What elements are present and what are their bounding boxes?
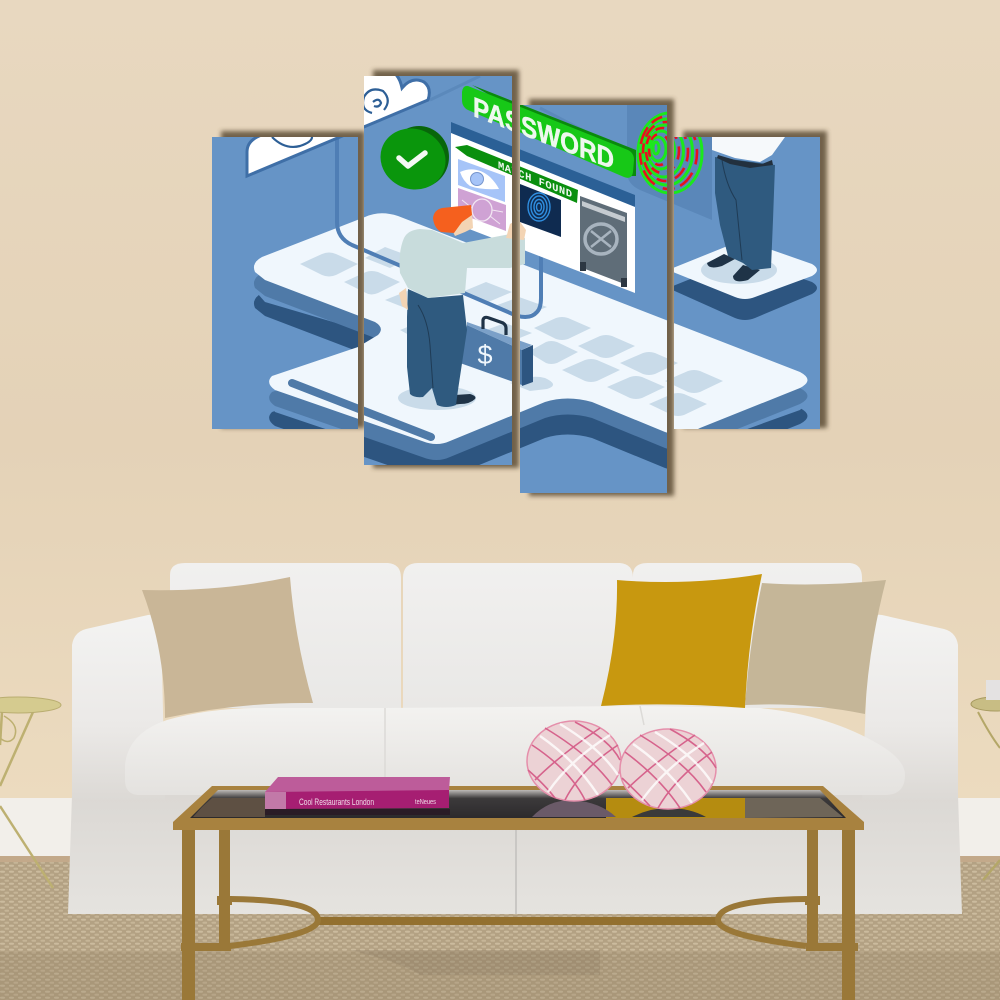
table top frame bbox=[173, 786, 864, 830]
vault safe bbox=[580, 196, 627, 287]
spacebar slot bbox=[292, 383, 431, 437]
canvas artwork: four panels bbox=[212, 76, 820, 493]
fingerprint tile bbox=[520, 184, 561, 237]
sofa skirt bbox=[68, 795, 962, 914]
back wall bands bbox=[430, 76, 583, 129]
platform top bbox=[254, 213, 807, 444]
screen board bbox=[451, 133, 635, 293]
man's hand bbox=[506, 222, 526, 240]
second man bbox=[707, 137, 785, 281]
man's far shoe bbox=[456, 394, 476, 404]
man's hair bbox=[433, 205, 472, 233]
cloud icon bbox=[247, 68, 429, 176]
man's face bbox=[454, 212, 473, 236]
book bbox=[265, 777, 450, 815]
man at screen bbox=[399, 205, 526, 407]
second man's belt bbox=[717, 155, 773, 168]
right tan pillow bbox=[745, 580, 886, 714]
fingerprint wall panel bbox=[627, 100, 712, 220]
briefcase: $ bbox=[477, 340, 493, 370]
check badge bbox=[380, 126, 449, 190]
book top bbox=[265, 777, 450, 792]
left tan pillow bbox=[142, 577, 313, 718]
keyboard keys bbox=[300, 247, 723, 416]
password sign: PASSWORD bbox=[473, 92, 614, 176]
book title: Cool Restaurants London bbox=[299, 797, 374, 807]
coffee table bbox=[173, 786, 864, 1000]
second man's shirt bbox=[712, 137, 785, 162]
book publisher: teNeues bbox=[415, 799, 436, 806]
book cover bbox=[265, 790, 449, 809]
man's trousers bbox=[407, 289, 467, 407]
yellow pillow bbox=[601, 574, 762, 708]
sofa back cushions bbox=[170, 563, 862, 708]
right vase bbox=[620, 729, 716, 809]
face tile bbox=[458, 188, 506, 231]
carpet floor bbox=[0, 862, 1000, 1000]
panel shadows bbox=[221, 70, 827, 496]
second man's trousers bbox=[715, 157, 775, 270]
second man's shoes bbox=[707, 254, 760, 281]
eye tile bbox=[458, 159, 505, 202]
platform gaps bbox=[259, 293, 802, 429]
glass vases bbox=[527, 721, 716, 817]
baseboard bbox=[0, 798, 1000, 862]
sofa right arm bbox=[862, 615, 958, 800]
vase reflection left bbox=[532, 800, 616, 817]
large fingerprint bbox=[638, 113, 702, 193]
screen bbox=[451, 122, 635, 293]
vase reflection right bbox=[632, 808, 706, 817]
screen header band bbox=[451, 122, 635, 207]
sofa seat cushions bbox=[125, 706, 905, 795]
left vase bbox=[527, 721, 621, 801]
man's floor shadow bbox=[398, 386, 476, 410]
side table: right bbox=[971, 680, 1000, 880]
side table: left bbox=[0, 697, 61, 888]
platform shadow layer bbox=[254, 295, 808, 468]
platform edge layer bbox=[254, 275, 808, 460]
table glass reflection bbox=[193, 798, 843, 818]
match found banner: MATCH FOUND bbox=[498, 160, 572, 202]
table glass bbox=[190, 790, 846, 818]
sofa bbox=[68, 563, 962, 914]
table legs bbox=[181, 830, 858, 1000]
second man's trouser crease bbox=[722, 160, 742, 260]
match found banner bbox=[455, 145, 578, 203]
right floor pad bbox=[668, 242, 817, 320]
connector cable bbox=[337, 137, 541, 317]
artwork background bbox=[212, 76, 820, 493]
briefcase bbox=[460, 317, 533, 386]
man's shirt bbox=[400, 229, 525, 298]
man's trouser crease bbox=[418, 305, 433, 388]
sofa left arm bbox=[72, 615, 165, 800]
man's left hand bbox=[399, 288, 408, 310]
table stretcher bbox=[318, 917, 718, 925]
room wall bbox=[0, 0, 1000, 800]
table curved braces bbox=[230, 899, 806, 946]
